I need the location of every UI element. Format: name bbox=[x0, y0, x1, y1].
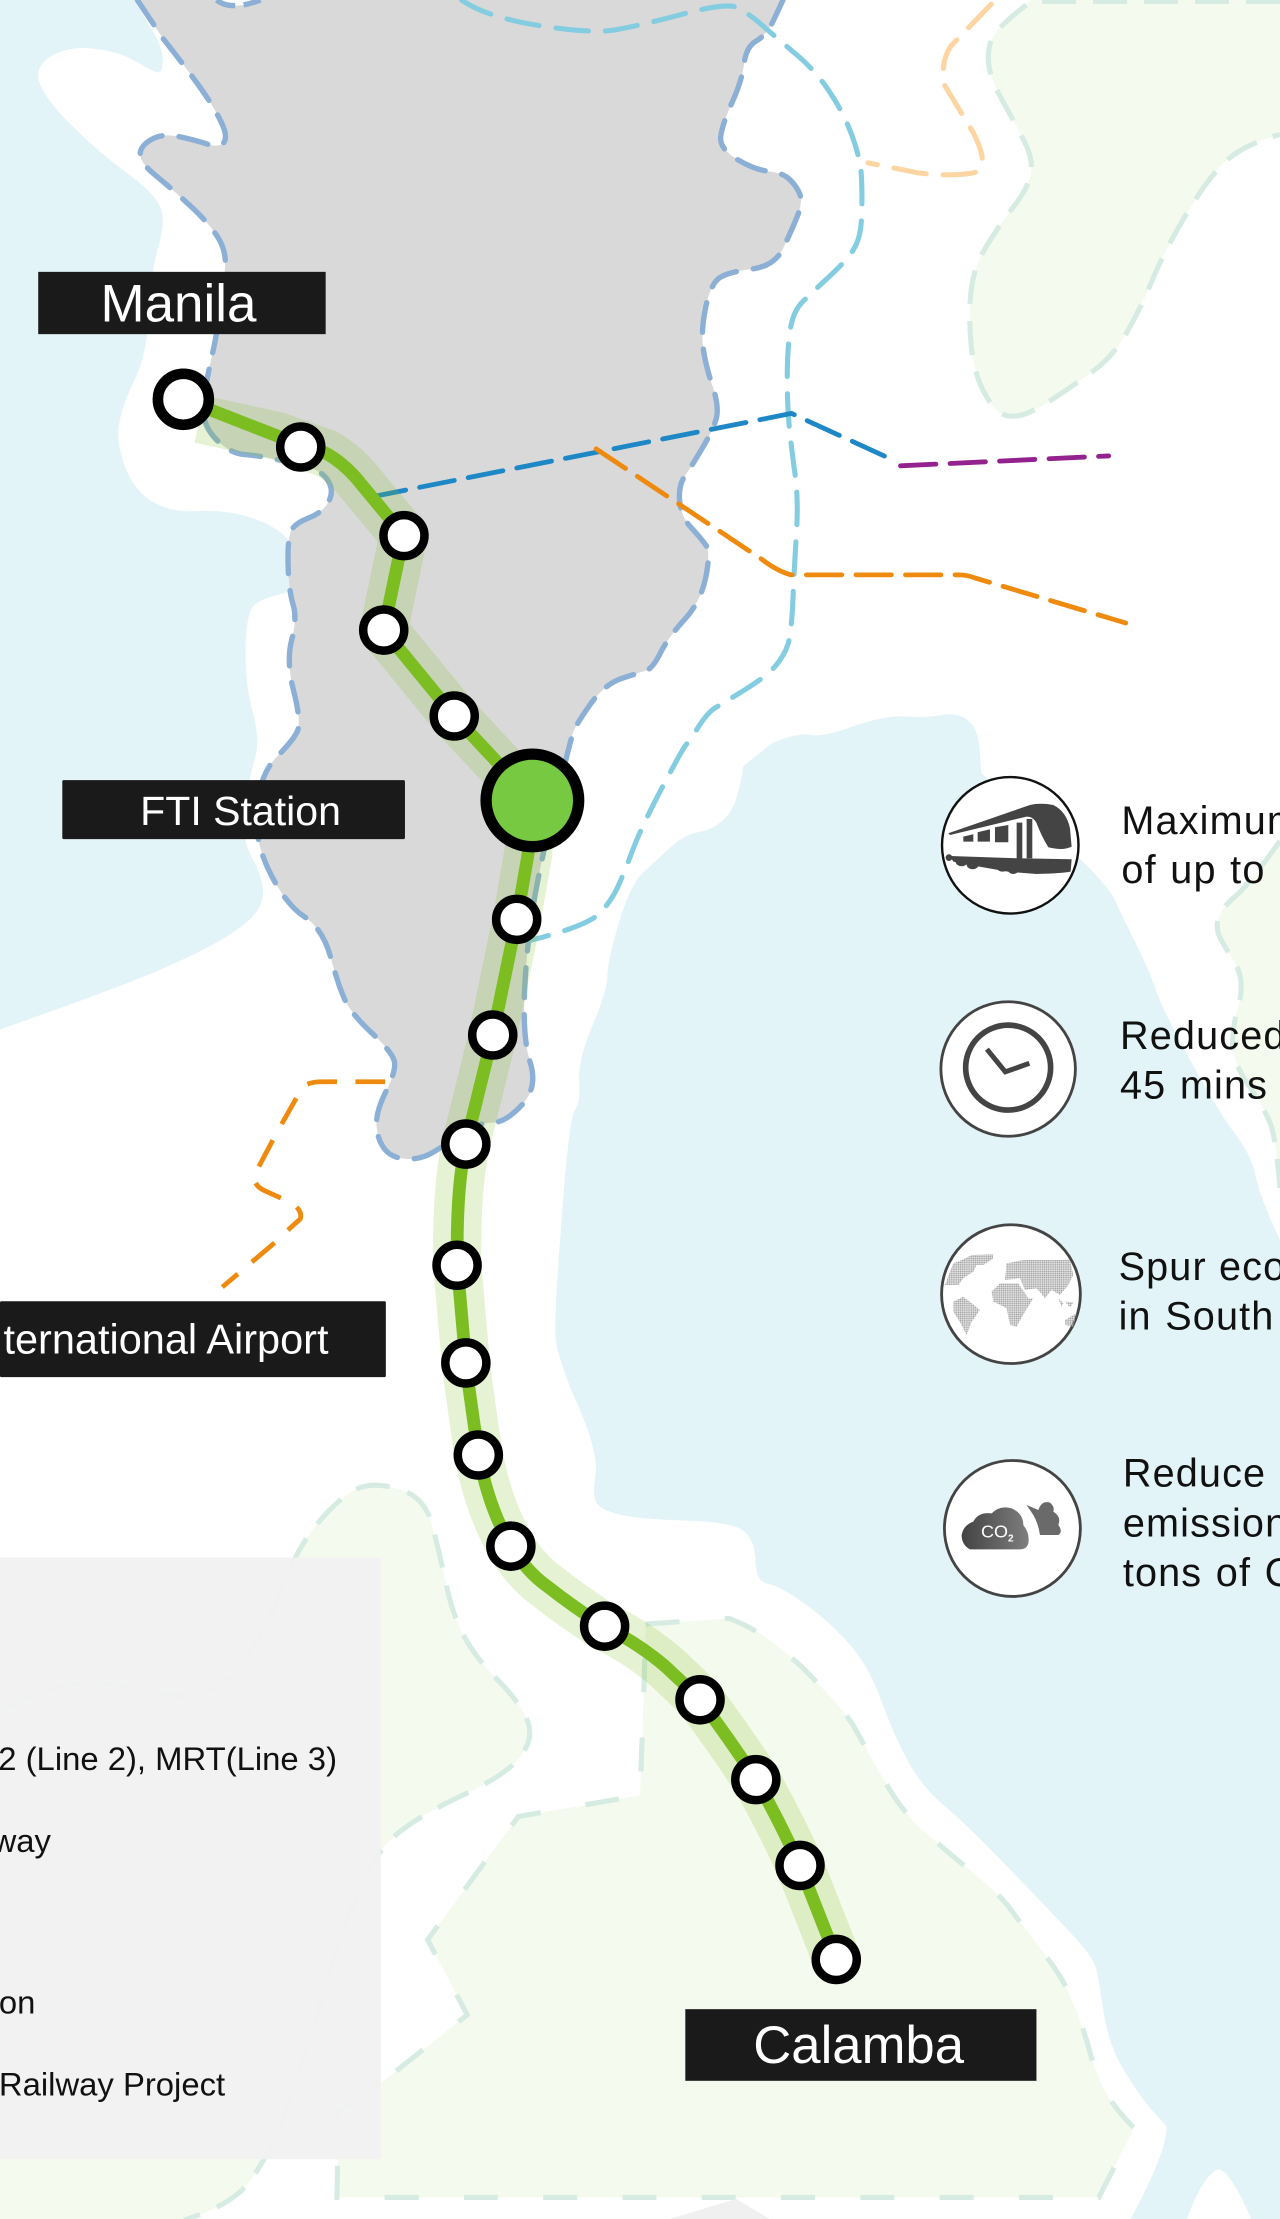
pale orange dashed line bbox=[868, 4, 991, 175]
label: Manila: Manila bbox=[101, 274, 257, 333]
land: small grey area at the bottom edge bbox=[665, 2199, 772, 2219]
text: spur economic growth bbox=[1119, 1245, 1280, 1339]
icon: CO2 clouds bbox=[944, 1461, 1080, 1596]
route corridor halo bbox=[200, 419, 837, 1960]
FTI station marker bbox=[486, 754, 579, 847]
land: southwest green province bbox=[0, 1485, 530, 2219]
text: maximum speed bbox=[1121, 799, 1280, 892]
icon: clock bbox=[941, 1002, 1075, 1136]
text: spur economic growth: in South bbox=[1119, 1295, 1274, 1339]
land: east green province bbox=[1217, 841, 1280, 1188]
label: International Airport bbox=[0, 1301, 386, 1377]
icon: train bbox=[942, 777, 1079, 914]
sea: lake bbox=[555, 714, 1280, 2219]
label: FTI Station: FTI Station bbox=[140, 788, 341, 834]
legend text: railway project: Railway Project bbox=[0, 2066, 225, 2103]
stations bbox=[158, 374, 857, 1980]
icon: CO2 clouds: CO bbox=[981, 1521, 1008, 1541]
metro manila grey area bbox=[137, 0, 801, 1159]
legend panel bbox=[0, 1557, 381, 2159]
label: Manila bbox=[38, 272, 326, 334]
text: reduced travel time bbox=[1120, 1014, 1280, 1108]
text: reduce emissions bbox=[1123, 1452, 1280, 1595]
label: International Airport: ternational Airport bbox=[3, 1316, 329, 1363]
label: Calamba bbox=[685, 2009, 1036, 2081]
light blue dashed boundary bbox=[462, 0, 862, 940]
icon: globe bbox=[942, 1225, 1080, 1364]
route line bbox=[183, 399, 837, 1960]
land: northeast green province bbox=[970, 0, 1280, 416]
sea: west bay bbox=[0, 0, 304, 1029]
label: Calamba: Calamba bbox=[753, 2016, 965, 2075]
legend text: existing lines: 2 (Line 2), MRT(Line 3) bbox=[0, 1740, 337, 1777]
icon: CO2 clouds: 2 bbox=[1008, 1533, 1014, 1544]
label: FTI Station bbox=[62, 780, 405, 839]
land: south green province bbox=[337, 1618, 1134, 2197]
orange dashed airport link bbox=[222, 1082, 385, 1287]
purple dashed rail line bbox=[901, 456, 1109, 466]
orange dashed rail line bbox=[596, 449, 1126, 623]
blue dashed rail line bbox=[371, 413, 893, 497]
